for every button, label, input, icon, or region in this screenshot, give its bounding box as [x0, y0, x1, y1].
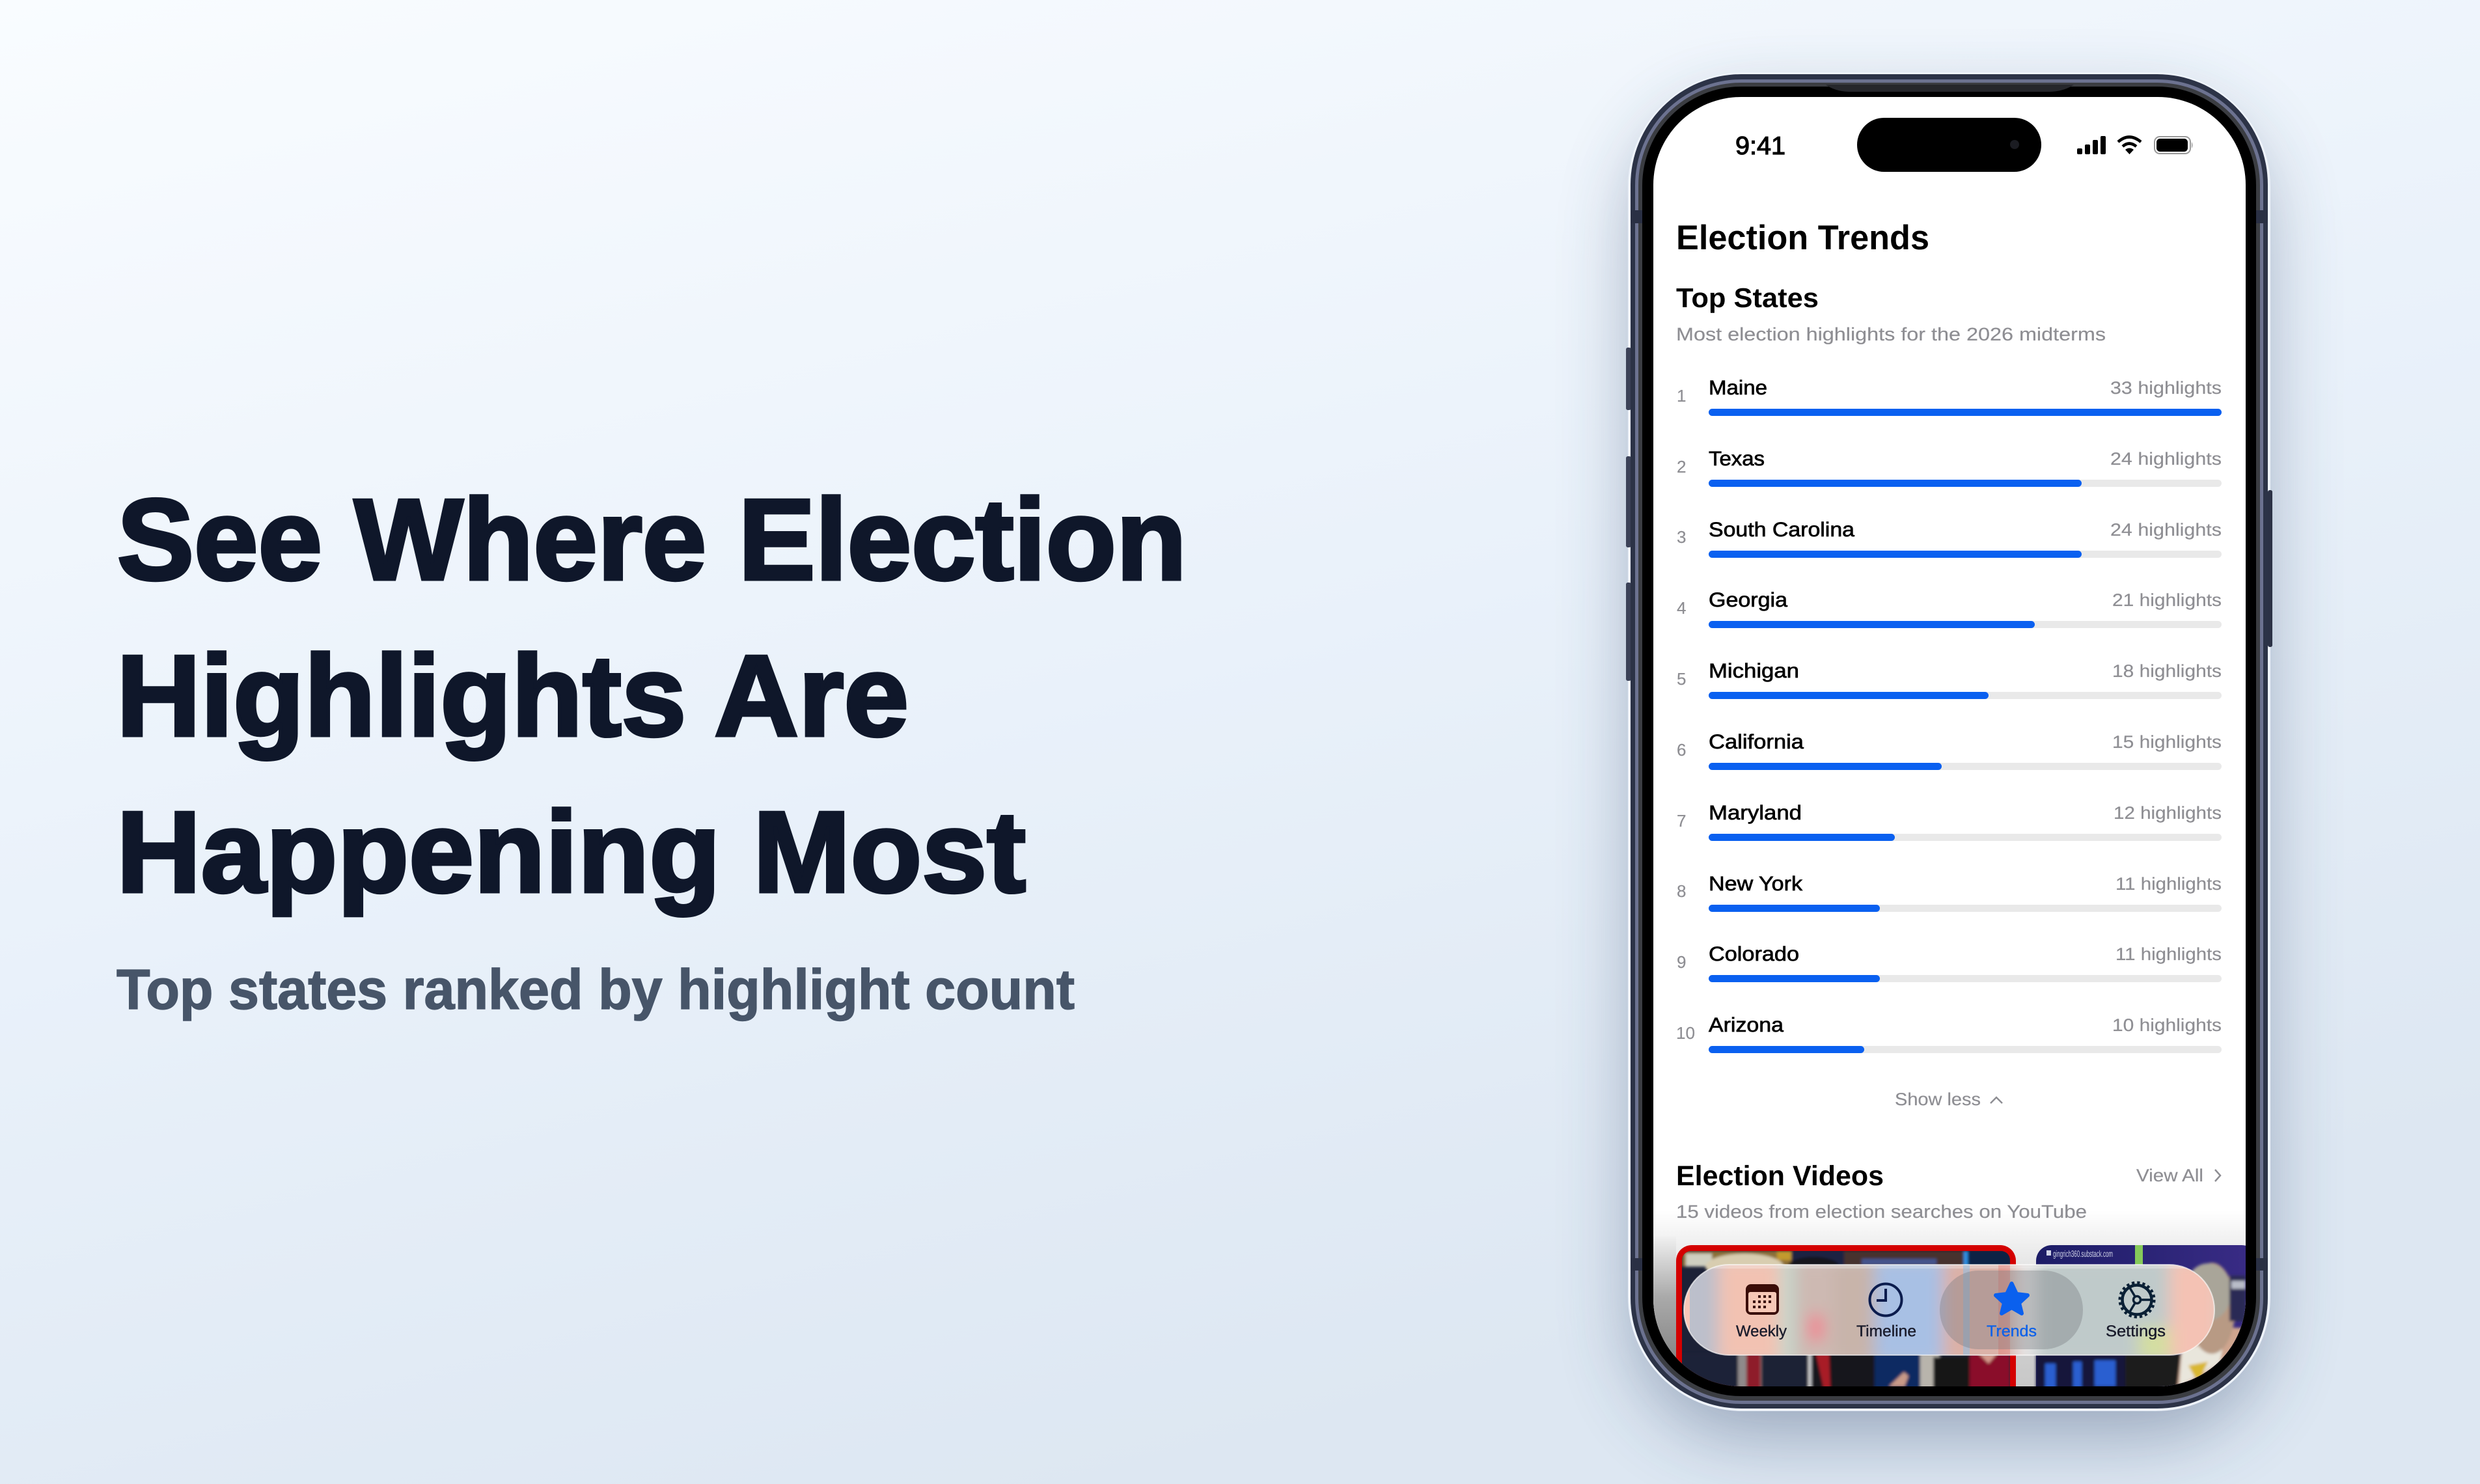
row 10: Arizona: Arizona [1709, 1013, 1784, 1036]
wifi icon [2118, 137, 2141, 154]
videos subheading: 15 videos from election searches on YouTube [1676, 1202, 2087, 1222]
subtitle: Top states ranked by highlight count [117, 958, 1075, 1021]
channel label [2046, 1250, 2113, 1259]
row 2: Texas: Texas [1709, 447, 1765, 470]
row 1: Maine [1677, 376, 2222, 416]
section subheading: Most election highlights for the 2026 midterms [1676, 324, 2106, 344]
view all link: View All [2136, 1166, 2203, 1185]
tab: weekly [1736, 1284, 1787, 1340]
row 9: Colorado [1677, 942, 2222, 982]
tab: settings: Settings [2106, 1323, 2166, 1340]
row 1: Maine: 1 [1677, 386, 1686, 405]
row 5: Michigan: 5 [1677, 669, 1686, 689]
headline: Highlights Are [117, 631, 909, 760]
phone frame [1626, 72, 2272, 1411]
row 9: Colorado: Colorado [1709, 942, 1799, 965]
row 7: Maryland [1677, 801, 2222, 841]
row 9: Colorado: 11 highlights [2115, 944, 2222, 964]
section heading: top states: Top States [1676, 282, 1819, 313]
tab: timeline: Timeline [1856, 1323, 1916, 1340]
signal icon [2077, 136, 2106, 154]
row 7: Maryland: 7 [1677, 811, 1686, 831]
row 1: Maine: 33 highlights [2110, 378, 2222, 398]
phone shadow [1637, 111, 2262, 1432]
status bar time: 9:41 [1735, 132, 1785, 160]
row 8: New York: 11 highlights [2115, 874, 2222, 894]
screen title: Election Trends [1676, 219, 1929, 257]
row 3: South Carolina: 24 highlights [2110, 520, 2222, 540]
show less control: Show less [1895, 1090, 1981, 1109]
ranked list [1676, 376, 2222, 1053]
row 6: California: California [1709, 730, 1804, 753]
screen [1653, 97, 2257, 1414]
selected tab highlight [1940, 1271, 2083, 1349]
row 8: New York [1677, 872, 2222, 912]
row 10: Arizona: 10 [1676, 1023, 1695, 1043]
row 7: Maryland: 12 highlights [2114, 803, 2222, 823]
phone mockup [1626, 72, 2272, 1414]
row 3: South Carolina [1677, 518, 2222, 558]
battery icon [2155, 137, 2192, 154]
headline: Happening Most [117, 788, 1026, 916]
section heading: election videos: Election Videos [1676, 1161, 1884, 1192]
row 4: Georgia [1677, 588, 2222, 628]
row 3: South Carolina: 3 [1677, 527, 1686, 547]
row 9: Colorado: 9 [1677, 952, 1686, 972]
row 2: Texas: 2 [1677, 457, 1686, 476]
row 1: Maine: Maine [1709, 376, 1767, 399]
tab: trends [1987, 1284, 2037, 1340]
row 2: Texas: 24 highlights [2110, 449, 2222, 469]
dynamic island [1857, 118, 2041, 172]
row 7: Maryland: Maryland [1709, 801, 1802, 824]
row 6: California: 6 [1677, 740, 1686, 760]
tab: settings [2106, 1283, 2166, 1340]
row 10: Arizona [1676, 1013, 2222, 1053]
row 8: New York: 8 [1677, 881, 1686, 901]
video card 2 [2033, 1245, 2246, 1386]
row 5: Michigan [1677, 659, 2222, 699]
channel label: gingrich360.substack.com [2053, 1248, 2113, 1259]
video card 1 [1676, 1245, 2016, 1386]
headline: See Where Election [117, 475, 1187, 604]
row 5: Michigan: Michigan [1709, 659, 1799, 682]
row 2: Texas [1677, 447, 2222, 487]
headline [117, 475, 1187, 916]
row 10: Arizona: 10 highlights [2112, 1015, 2222, 1035]
tab: trends: Trends [1987, 1323, 2037, 1340]
tab: timeline [1856, 1284, 1916, 1340]
tab: weekly: Weekly [1736, 1323, 1787, 1340]
row 6: California: 15 highlights [2112, 732, 2222, 752]
side buttons [1626, 348, 2272, 681]
row 3: South Carolina: South Carolina [1709, 518, 1855, 541]
row 4: Georgia: Georgia [1709, 588, 1788, 611]
status icons [2077, 136, 2192, 154]
row 4: Georgia: 4 [1677, 598, 1686, 618]
row 6: California [1677, 730, 2222, 770]
row 5: Michigan: 18 highlights [2112, 661, 2222, 681]
tab bar [1683, 1264, 2215, 1356]
row 4: Georgia: 21 highlights [2112, 590, 2222, 610]
row 8: New York: New York [1709, 872, 1803, 895]
